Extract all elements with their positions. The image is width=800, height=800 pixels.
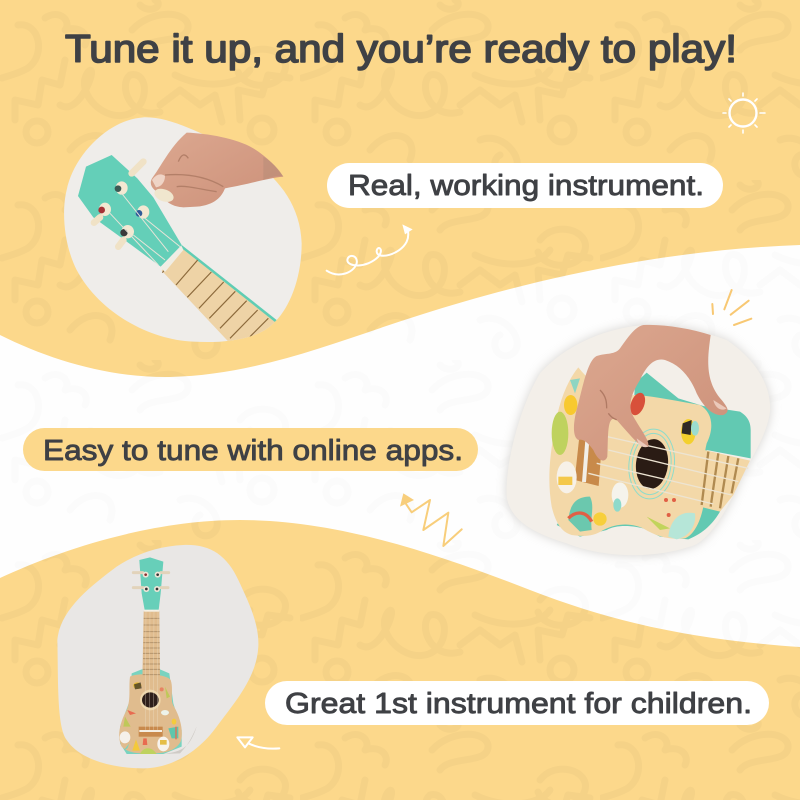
photo: hand tuning ukulele headstock xyxy=(64,117,302,343)
title: Tune it up, and you’re ready to play! xyxy=(65,28,737,71)
tuners xyxy=(133,572,169,592)
bridge xyxy=(575,437,602,486)
pill: real working instrument xyxy=(327,163,723,208)
pill: easy to tune: Easy to tune with online apps. xyxy=(43,435,463,467)
photo backdrop blob xyxy=(507,325,770,555)
photo: hand strumming ukulele xyxy=(507,325,770,555)
strings xyxy=(588,435,748,504)
arrow: curly white xyxy=(327,224,413,274)
ukulele body face xyxy=(549,367,711,539)
soft shadow xyxy=(507,325,770,555)
icon: yellow burst lines xyxy=(712,290,751,325)
body face xyxy=(119,674,182,754)
pill: easy to tune xyxy=(23,428,478,471)
pill: great first instrument xyxy=(265,681,769,725)
bridge xyxy=(139,727,163,737)
sound hole xyxy=(625,427,678,501)
icon: sun xyxy=(723,93,765,133)
sound hole xyxy=(140,690,161,710)
head xyxy=(139,557,163,610)
hand xyxy=(151,133,283,207)
fretboard xyxy=(700,449,750,512)
ukulele headstock xyxy=(78,155,182,267)
pill: real working instrument: Real, working instrument. xyxy=(348,170,704,202)
arrow: small white xyxy=(237,737,279,749)
floor shadow xyxy=(163,727,197,754)
photo: full ukulele xyxy=(57,545,258,768)
tuning pegs xyxy=(94,162,180,265)
neck xyxy=(142,610,160,680)
ukulele side xyxy=(557,373,751,539)
ukulele fretboard xyxy=(162,245,278,343)
body decorations xyxy=(552,378,699,539)
pill: great first instrument: Great 1st instrument for children. xyxy=(285,688,752,720)
arrow: yellow zigzag xyxy=(400,493,462,546)
body sides xyxy=(120,669,182,754)
hand xyxy=(574,325,728,461)
white wave band xyxy=(0,245,800,647)
body decorations xyxy=(120,682,178,754)
